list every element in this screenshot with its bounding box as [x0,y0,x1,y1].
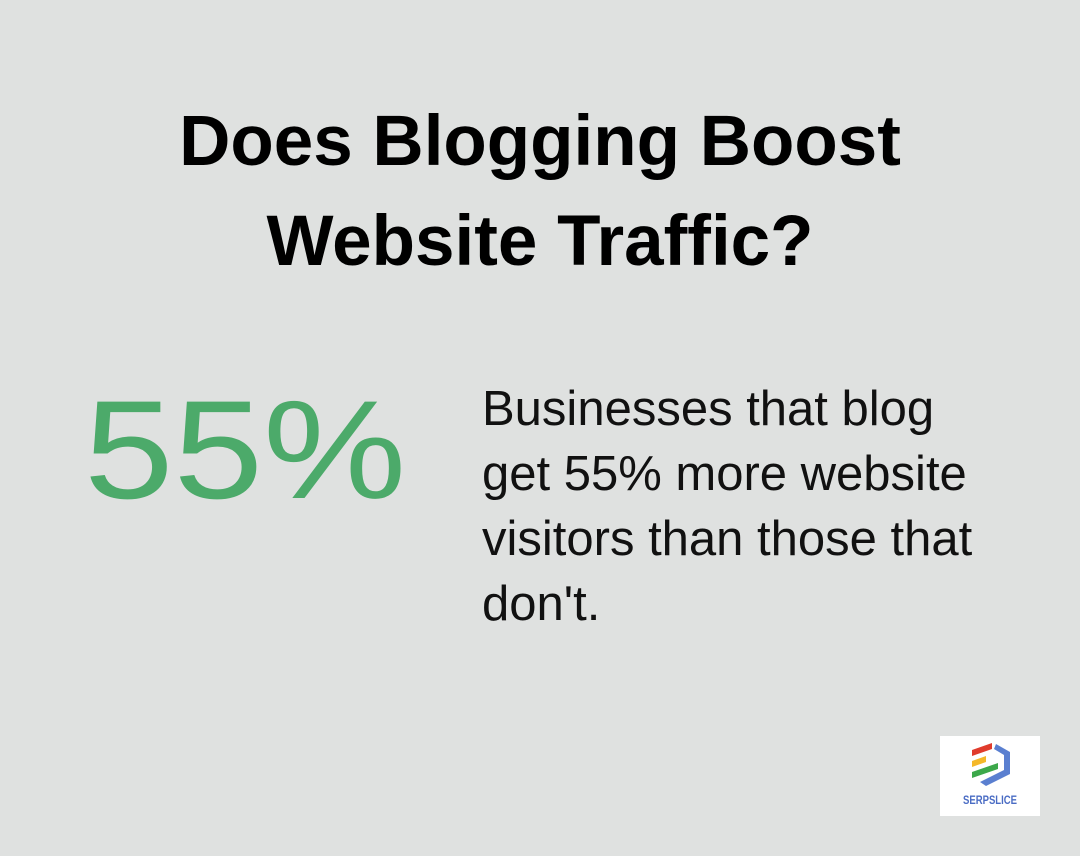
title: Website Traffic? [266,202,814,281]
description text: get 55% more website [482,447,967,501]
logo: serpslice [940,736,1040,816]
big stat: 55% [84,371,406,528]
title [179,102,901,281]
description text: Businesses that blog [482,382,934,436]
title: Does Blogging Boost [179,102,901,181]
logo: serpslice: SERPSLICE [963,793,1017,807]
description text: don't. [482,577,600,631]
description text [482,382,972,631]
description text: visitors than those that [482,512,972,566]
